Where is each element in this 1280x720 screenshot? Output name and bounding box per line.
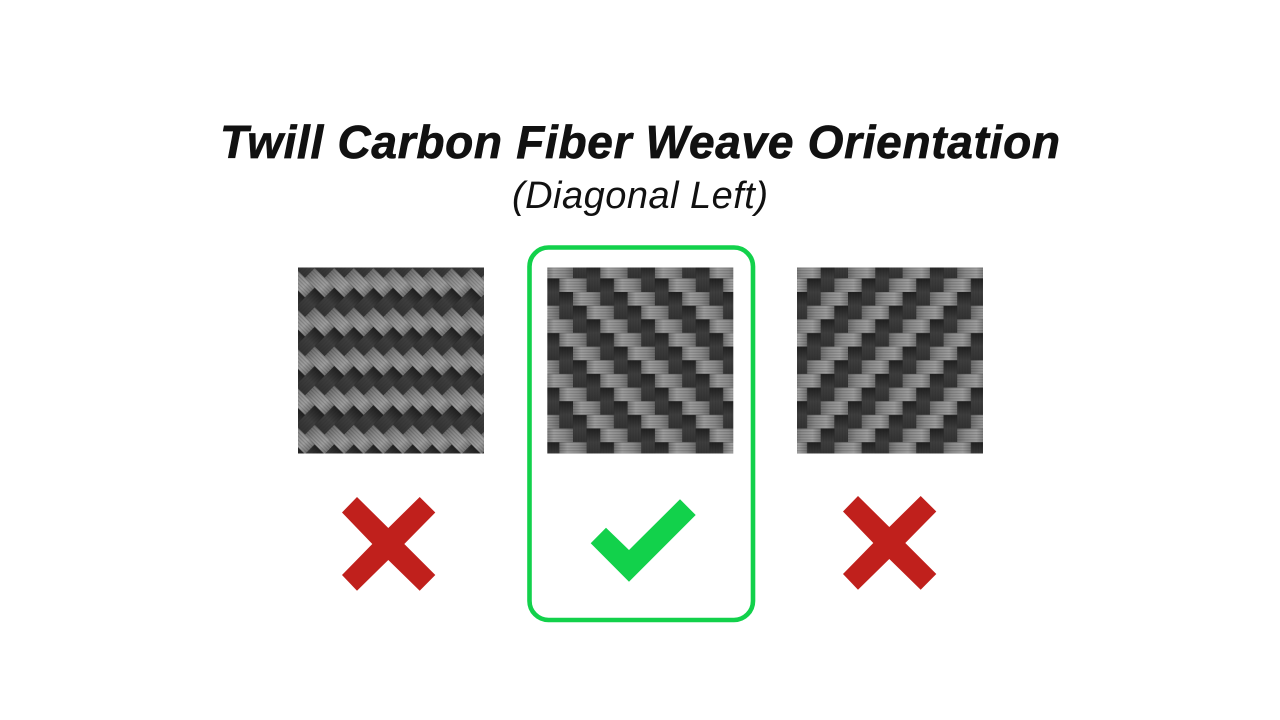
green highlight frame around correct option bbox=[530, 248, 753, 620]
icon: red cross left bbox=[342, 497, 435, 591]
icon: green check mark bbox=[591, 499, 696, 582]
right weave swatch: incorrect orientation bbox=[797, 268, 983, 454]
subtitle: (Diagonal Left) bbox=[512, 175, 768, 217]
icon: red cross right bbox=[843, 496, 936, 590]
title: Twill Carbon Fiber Weave Orientation bbox=[220, 116, 1060, 168]
middle weave swatch: correct orientation bbox=[547, 268, 733, 454]
left weave swatch: incorrect orientation bbox=[298, 268, 484, 454]
